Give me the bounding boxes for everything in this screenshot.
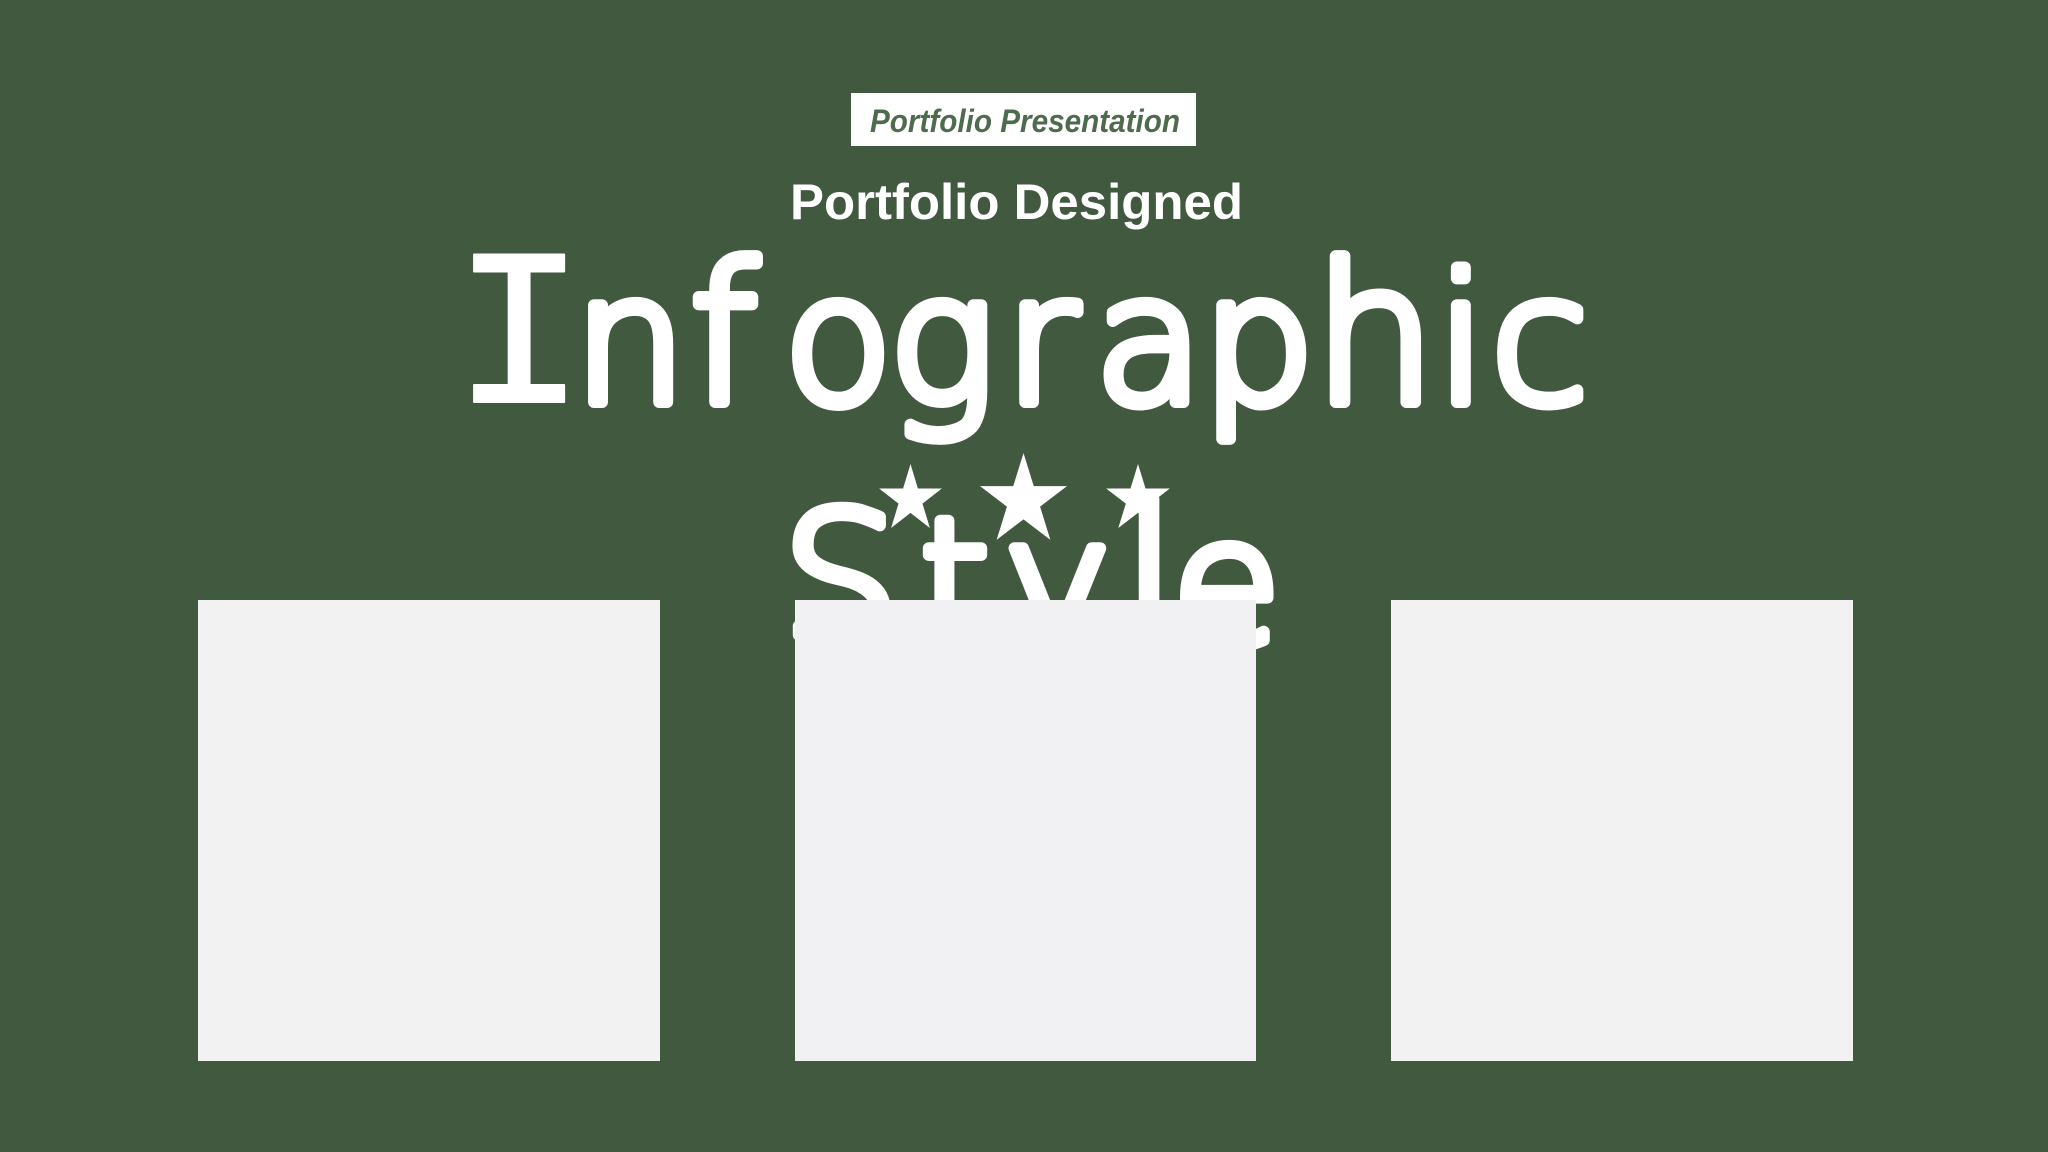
title line 1: p (1202, 238, 1314, 444)
title line 1: a (1095, 238, 1203, 444)
panel: centre (795, 600, 1256, 1061)
title line 1: h (1314, 225, 1436, 448)
subtitle: Portfolio Designed (790, 174, 1243, 230)
title line 1: n (574, 238, 686, 444)
star: centre (980, 453, 1067, 540)
title line 2: e (1172, 481, 1281, 687)
badge: Portfolio Presentation (851, 93, 1196, 146)
title line 1: i (1437, 238, 1486, 444)
title line 1: c (1491, 238, 1588, 444)
star: right (1106, 464, 1170, 528)
title line 2: y (1005, 481, 1110, 687)
title line 1: I (452, 217, 586, 470)
title line 1: r (1005, 238, 1078, 444)
badge: Portfolio Presentation: Portfolio Presentation (870, 103, 1180, 139)
title line 1: g (889, 238, 995, 444)
star: left (879, 464, 942, 528)
panel: right (1391, 600, 1853, 1061)
title line 2: t (920, 481, 989, 687)
title line 2: l (1123, 468, 1176, 691)
title line 2: S (782, 473, 899, 689)
stars (879, 453, 1170, 540)
title line 1: o (784, 238, 892, 444)
title line 1: f (690, 225, 758, 448)
panel: left (198, 600, 660, 1061)
